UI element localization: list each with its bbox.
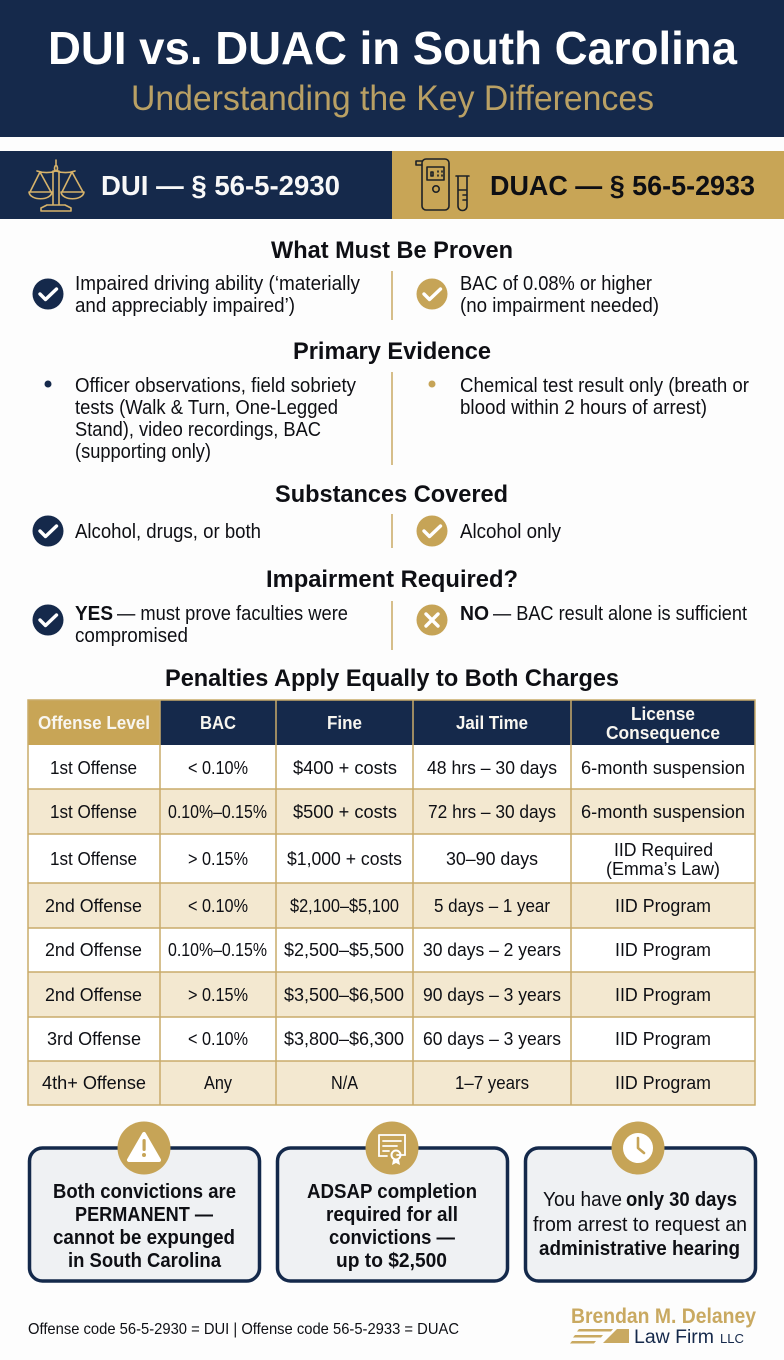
DUI evidence: Officer observations, field sobriety	[75, 375, 356, 397]
row: 2nd offense over 0.15: > 0.15%	[188, 984, 248, 1005]
DUI impairment answer: YES	[75, 603, 113, 625]
section: impairment required	[32, 566, 747, 650]
row: 4th offense: 4th+ Offense	[42, 1072, 146, 1093]
callout: ADSAP completion	[278, 1122, 508, 1281]
row: 1st offense under 0.10: < 0.10%	[188, 757, 248, 778]
row: 2nd offense 0.10 to 0.15	[45, 939, 711, 960]
table header row: Consequence	[606, 722, 720, 743]
row: 1st offense 0.10 to 0.15: 1st Offense	[50, 801, 137, 822]
table header row: Offense Level	[38, 712, 150, 733]
callout: 30 day deadline: You have	[543, 1189, 622, 1211]
row: 4th offense: 1–7 years	[455, 1072, 529, 1093]
row: 1st offense over 0.15: $1,000 + costs	[287, 848, 402, 869]
heading: Primary Evidence	[293, 338, 491, 365]
row: 1st offense over 0.15: 1st Offense	[50, 848, 137, 869]
row: 3rd offense	[47, 1028, 711, 1049]
row: 1st offense under 0.10: 6-month suspension	[581, 757, 745, 778]
DUI requirement: Impaired driving ability (‘materially	[75, 273, 360, 295]
row: 2nd offense over 0.15	[45, 984, 711, 1005]
law firm logo: Brendan M. Delaney	[571, 1305, 756, 1328]
icon: clock	[612, 1122, 664, 1174]
row: 4th offense: Any	[204, 1072, 233, 1093]
DUI evidence: Stand), video recordings, BAC	[75, 419, 321, 441]
row: 1st offense over 0.15: > 0.15%	[188, 848, 248, 869]
row: 4th offense: IID Program	[615, 1072, 711, 1093]
row: 2nd offense under 0.10: $2,100–$5,100	[290, 895, 399, 916]
row: 2nd offense over 0.15: $3,500–$6,500	[284, 984, 404, 1005]
DUI substances	[32, 516, 261, 546]
title banner	[0, 0, 784, 137]
table header row: License	[631, 703, 695, 724]
DUAC impairment answer: — BAC result alone is sufficient	[493, 603, 747, 625]
row: 1st offense under 0.10: $400 + costs	[293, 757, 397, 778]
icon: certificate	[366, 1122, 418, 1174]
DUAC impairment answer	[416, 603, 747, 636]
column header: DUI	[0, 151, 392, 219]
row: 3rd offense: $3,800–$6,300	[284, 1028, 404, 1049]
icon: warning triangle	[118, 1122, 170, 1174]
callout: ADSAP completion: required for all	[326, 1204, 458, 1226]
DUAC impairment answer: NO	[460, 603, 489, 625]
callout: permanent convictions: cannot be expunged	[53, 1227, 235, 1249]
row: 1st offense under 0.10	[50, 757, 745, 778]
DUAC substances: Alcohol only	[460, 521, 561, 543]
callout: ADSAP completion: convictions —	[329, 1227, 455, 1249]
callout: 30 day deadline: from arrest to request an	[533, 1214, 747, 1236]
callout: permanent convictions	[30, 1122, 260, 1281]
row: 2nd offense under 0.10: IID Program	[615, 895, 711, 916]
row: 2nd offense 0.10 to 0.15: $2,500–$5,500	[284, 939, 404, 960]
penalties table	[28, 700, 755, 1105]
row: 1st offense 0.10 to 0.15: 6-month suspension	[581, 801, 745, 822]
callout: ADSAP completion: up to $2,500	[336, 1250, 447, 1272]
callout: permanent convictions: PERMANENT —	[75, 1204, 213, 1226]
section: primary evidence	[44, 338, 749, 465]
row: 1st offense 0.10 to 0.15: $500 + costs	[293, 801, 397, 822]
heading: Substances Covered	[275, 481, 508, 508]
row: 3rd offense: 60 days – 3 years	[423, 1028, 561, 1049]
section: substances covered	[32, 481, 561, 548]
row: 1st offense under 0.10: 1st Offense	[50, 757, 137, 778]
row: 2nd offense under 0.10: 5 days – 1 year	[434, 895, 550, 916]
row: 2nd offense under 0.10	[45, 895, 711, 916]
row: 4th offense	[42, 1072, 711, 1093]
heading: What Must Be Proven	[271, 237, 513, 264]
row: 1st offense 0.10 to 0.15: 0.10%–0.15%	[168, 801, 267, 822]
callout: permanent convictions: Both convictions are	[53, 1181, 236, 1203]
row: 2nd offense 0.10 to 0.15: 30 days – 2 years	[423, 939, 561, 960]
DUI impairment answer: — must prove faculties were	[117, 603, 348, 625]
row: 1st offense 0.10 to 0.15: 72 hrs – 30 days	[428, 801, 556, 822]
DUI evidence: (supporting only)	[75, 441, 211, 463]
row: 1st offense over 0.15: (Emma’s Law)	[606, 858, 720, 879]
row: 1st offense over 0.15	[50, 839, 720, 879]
callout: 30 day deadline: administrative hearing	[539, 1238, 740, 1260]
row: 2nd offense under 0.10: < 0.10%	[188, 895, 248, 916]
row: 1st offense over 0.15: 30–90 days	[446, 848, 538, 869]
subtitle: Understanding the Key Differences	[131, 79, 654, 118]
DUI evidence: tests (Walk & Turn, One-Legged	[75, 397, 338, 419]
row: 2nd offense over 0.15: 2nd Offense	[45, 984, 142, 1005]
law firm logo	[570, 1305, 756, 1348]
table header row: Fine	[327, 712, 362, 733]
DUAC requirement	[416, 273, 659, 317]
DUI substances: Alcohol, drugs, or both	[75, 521, 261, 543]
DUAC requirement: (no impairment needed)	[460, 295, 659, 317]
DUAC evidence: Chemical test result only (breath or	[460, 375, 749, 397]
DUI requirement: and appreciably impaired’)	[75, 295, 295, 317]
table header row	[28, 700, 755, 745]
icon: breathalyzer and test tube	[416, 159, 469, 210]
DUAC label: DUAC — § 56-5-2933	[490, 170, 755, 201]
law firm logo: Law Firm	[634, 1327, 714, 1348]
callout: ADSAP completion: ADSAP completion	[307, 1181, 477, 1203]
column header: DUAC	[392, 151, 784, 219]
row: 1st offense 0.10 to 0.15	[50, 801, 745, 822]
DUI label: DUI — § 56-5-2930	[101, 170, 340, 201]
callout: 30 day deadline	[526, 1122, 756, 1281]
DUI impairment answer	[32, 603, 348, 647]
DUAC evidence	[428, 375, 749, 419]
DUAC evidence: blood within 2 hours of arrest)	[460, 397, 707, 419]
row: 1st offense under 0.10: 48 hrs – 30 days	[427, 757, 557, 778]
row: 2nd offense 0.10 to 0.15: 0.10%–0.15%	[168, 939, 267, 960]
footer offense code note: Offense code 56-5-2930 = DUI | Offense code 56-5-2933 = DUAC	[28, 1321, 459, 1338]
section: what must be proven	[32, 237, 659, 320]
penalties heading: Penalties Apply Equally to Both Charges	[165, 665, 619, 692]
callout: 30 day deadline: only 30 days	[626, 1189, 737, 1211]
DUAC requirement: BAC of 0.08% or higher	[460, 273, 652, 295]
DUI impairment answer: compromised	[75, 625, 188, 647]
row: 2nd offense over 0.15: IID Program	[615, 984, 711, 1005]
row: 3rd offense: < 0.10%	[188, 1028, 248, 1049]
row: 2nd offense 0.10 to 0.15: 2nd Offense	[45, 939, 142, 960]
DUAC substances	[416, 516, 561, 546]
heading: Impairment Required?	[266, 566, 518, 593]
table header row: BAC	[200, 712, 236, 733]
icon: scales of justice	[29, 160, 84, 211]
table header row: Jail Time	[456, 712, 528, 733]
title: DUI vs. DUAC in South Carolina	[48, 22, 737, 74]
row: 4th offense: N/A	[331, 1072, 359, 1093]
row: 2nd offense over 0.15: 90 days – 3 years	[423, 984, 561, 1005]
row: 1st offense over 0.15: IID Required	[614, 839, 713, 860]
row: 3rd offense: IID Program	[615, 1028, 711, 1049]
row: 3rd offense: 3rd Offense	[47, 1028, 141, 1049]
DUI evidence	[44, 375, 356, 463]
DUI requirement	[32, 273, 360, 317]
logo stripes mark	[570, 1329, 629, 1344]
callout: permanent convictions: in South Carolina	[68, 1250, 222, 1272]
law firm logo: LLC	[720, 1331, 744, 1346]
row: 2nd offense under 0.10: 2nd Offense	[45, 895, 142, 916]
row: 2nd offense 0.10 to 0.15: IID Program	[615, 939, 711, 960]
